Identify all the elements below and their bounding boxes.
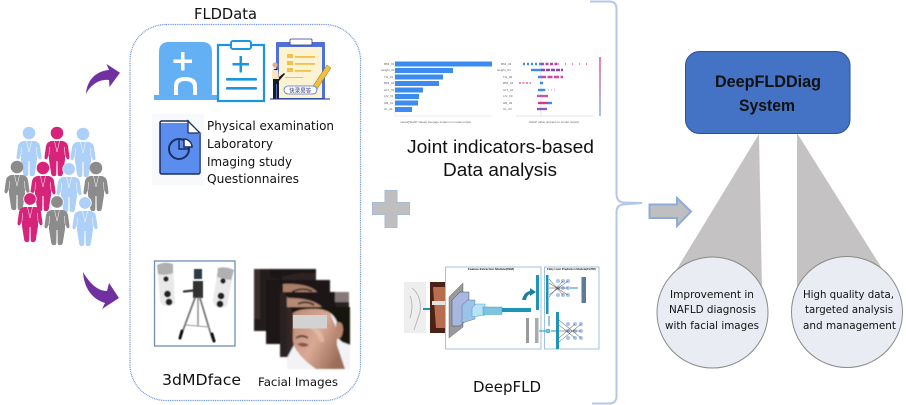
person row 1 — [16, 127, 96, 177]
arrow: people to 3dMDface — [83, 272, 119, 309]
chart: SHAP beeswarm plot: LIV_03 — [503, 94, 513, 98]
tripod — [180, 269, 214, 341]
panel: DeepFLDDiag system box: DeepFLDDiag — [715, 73, 821, 91]
icon: report clipboard with figure and pencil — [270, 39, 331, 100]
chart: SHAP beeswarm plot: BMI_03 — [501, 62, 512, 66]
heading: Joint indicators-based Data analysis: Joint indicators-based — [407, 137, 594, 157]
icon: document with pie chart — [152, 114, 204, 185]
chart: feature importance bar chart: AL_01 — [384, 107, 393, 111]
facial image layer 1 — [254, 269, 316, 331]
facial image layer 2 — [266, 280, 330, 344]
icon: medical clipboard — [218, 41, 264, 101]
image: 3dMDface camera rig — [154, 261, 235, 346]
chart: feature importance bar chart: BMI_01 — [384, 62, 395, 66]
callout circle: data and management: High quality data, — [803, 288, 894, 301]
chart: feature importance bar chart: TG_01 — [384, 75, 394, 79]
diagram: DeepFLD network — [404, 267, 599, 349]
feature extraction panel — [446, 267, 541, 349]
callout circle: data and management — [792, 256, 902, 368]
chart: SHAP beeswarm plot: ALT_01 — [503, 88, 514, 92]
fatty liver prediction panel — [539, 267, 599, 349]
arrow: to DeepFLDDiag system — [650, 198, 691, 226]
callout circle: NAFLD diagnosis: Improvement in — [670, 288, 754, 301]
icon: hospital — [154, 42, 217, 100]
heading: Joint indicators-based Data analysis — [407, 137, 594, 180]
panel: FLDData dotted frame — [130, 24, 360, 400]
chart: SHAP beeswarm plot: AL_03 — [503, 107, 512, 111]
icon: plus sign — [372, 190, 410, 228]
callout circle: NAFLD diagnosis: with facial images — [665, 319, 759, 332]
camera pod left — [157, 263, 175, 306]
callout cone: right — [797, 133, 888, 290]
panel: DeepFLDDiag system box: System — [739, 97, 795, 115]
fatty liver prediction panel: Fatty Liver Prediction Module(FLPM) — [547, 267, 596, 271]
heading: Joint indicators-based Data analysis: Data analysis — [443, 160, 557, 180]
chart: SHAP beeswarm plot: TG_03 — [503, 75, 513, 79]
chart: SHAP beeswarm plot: HB_03 — [503, 101, 513, 105]
text block: data categories: Physical examination — [207, 118, 334, 133]
input images — [404, 282, 445, 333]
colour bar — [599, 57, 601, 116]
chart: SHAP beeswarm plot: BMI_04 — [503, 81, 514, 85]
text block: data categories — [207, 118, 334, 186]
chart: SHAP beeswarm plot: weight_03 — [497, 68, 511, 72]
image: stack of facial images — [254, 269, 350, 369]
chart: feature importance bar chart: LIV_01 — [384, 94, 394, 98]
text block: data categories: Laboratory — [207, 136, 274, 151]
label: Facial Images: Facial Images — [258, 375, 338, 389]
text block: data categories: Imaging study — [207, 154, 293, 169]
chart: SHAP beeswarm plot — [497, 57, 601, 124]
person row 3 — [18, 193, 98, 246]
icon: report clipboard with figure and pencil: 快录易答 — [289, 86, 312, 94]
chart: feature importance bar chart: weight_01 — [381, 68, 395, 72]
callout circle: NAFLD diagnosis — [657, 257, 768, 368]
chart: feature importance bar chart: BMI_04 — [384, 81, 395, 85]
brace — [590, 2, 642, 404]
callout circle: data and management: and management — [803, 319, 897, 332]
person row 2 — [4, 161, 108, 212]
callout circle: NAFLD diagnosis: NAFLD diagnosis — [669, 303, 756, 316]
panel: DeepFLDDiag system box — [686, 52, 850, 134]
heading: FLDData: FLDData — [194, 5, 257, 23]
facial image layer 3 — [280, 292, 349, 357]
chart: SHAP beeswarm plot: SHAP value (impact on model output) — [529, 120, 579, 124]
callout cone: left — [675, 134, 762, 290]
arrow: people to FLDData — [86, 64, 120, 94]
text block: data categories: Questionnaires — [207, 171, 299, 186]
chart: feature importance bar chart: HB_01 — [384, 101, 394, 105]
facial image layer 4 — [287, 307, 350, 369]
face anonymising bar — [293, 315, 327, 328]
people group — [4, 127, 108, 246]
label: 3dMDface: 3dMDface — [162, 371, 241, 389]
chart: feature importance bar chart: ALT_01 — [384, 88, 395, 92]
chart: feature importance bar chart: mean(|SHAP value|) average impact on model output — [400, 120, 471, 124]
camera pod right — [213, 267, 234, 308]
feature extraction panel: Feature Extraction Module(FEM) — [468, 267, 514, 271]
chart: feature importance bar chart — [381, 61, 492, 124]
label: DeepFLD: DeepFLD — [473, 378, 541, 396]
callout circle: data and management: targeted analysis — [805, 303, 893, 316]
